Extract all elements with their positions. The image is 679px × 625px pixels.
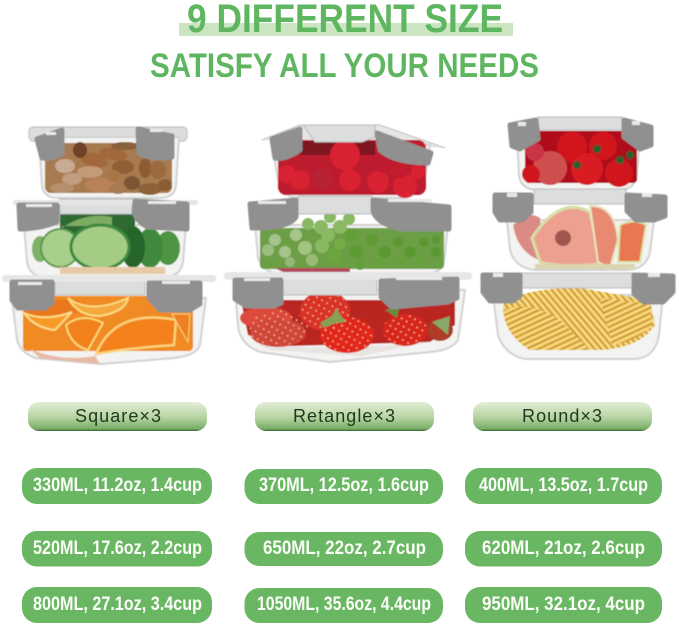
capacity: 950ML: 950ML, 32.1oz, 4cup [482, 594, 645, 615]
capacity: 370ML [244, 469, 443, 504]
capacity: 650ML [244, 532, 443, 566]
container: almonds [29, 127, 187, 198]
capacity: 950ML [465, 587, 662, 623]
capacity: 520ML: 520ML, 17.6oz, 2.2cup [33, 538, 202, 559]
panel: round containers stack [483, 117, 673, 359]
container: strawberries [224, 272, 472, 362]
label: Retangle×3 [255, 402, 434, 431]
container: figs [495, 189, 665, 270]
label: Square×3 [28, 402, 207, 431]
container: cucumbers [13, 199, 198, 277]
capacity: 330ML [22, 468, 212, 504]
capacity: 1050ML: 1050ML, 35.6oz, 4.4cup [257, 594, 431, 615]
label: Round×3 [473, 402, 652, 431]
capacity: 520ML [22, 531, 212, 566]
label: Square×3: Square×3 [75, 406, 161, 426]
capacity: 650ML: 650ML, 22oz, 2.7cup [263, 538, 426, 559]
capacity: 370ML: 370ML, 12.5oz, 1.6cup [259, 475, 429, 496]
capacity: 400ML: 400ML, 13.5oz, 1.7cup [479, 475, 648, 496]
container: pasta [483, 273, 673, 359]
heading: satisfy all your needs: SATISFY ALL YOUR NEEDS [150, 47, 539, 85]
container: tomatoes [510, 117, 651, 190]
container: oranges [2, 275, 216, 364]
capacity: 1050ML [244, 588, 443, 623]
label: Round×3: Round×3 [522, 406, 602, 426]
label: Retangle×3: Retangle×3 [293, 406, 395, 426]
capacity: 330ML: 330ML, 11.2oz, 1.4cup [33, 475, 202, 496]
capacity: 400ML [465, 468, 662, 504]
container: peas [250, 196, 449, 274]
capacity: 800ML: 800ML, 27.1oz, 3.4cup [33, 594, 202, 615]
capacity: 620ML: 620ML, 21oz, 2.6cup [482, 538, 645, 559]
container: raspberries [262, 125, 445, 198]
capacity: 800ML [22, 587, 212, 623]
panel: square containers stack [2, 127, 216, 364]
panel: rectangle containers stack [224, 125, 472, 362]
capacity: 620ML [465, 531, 662, 566]
